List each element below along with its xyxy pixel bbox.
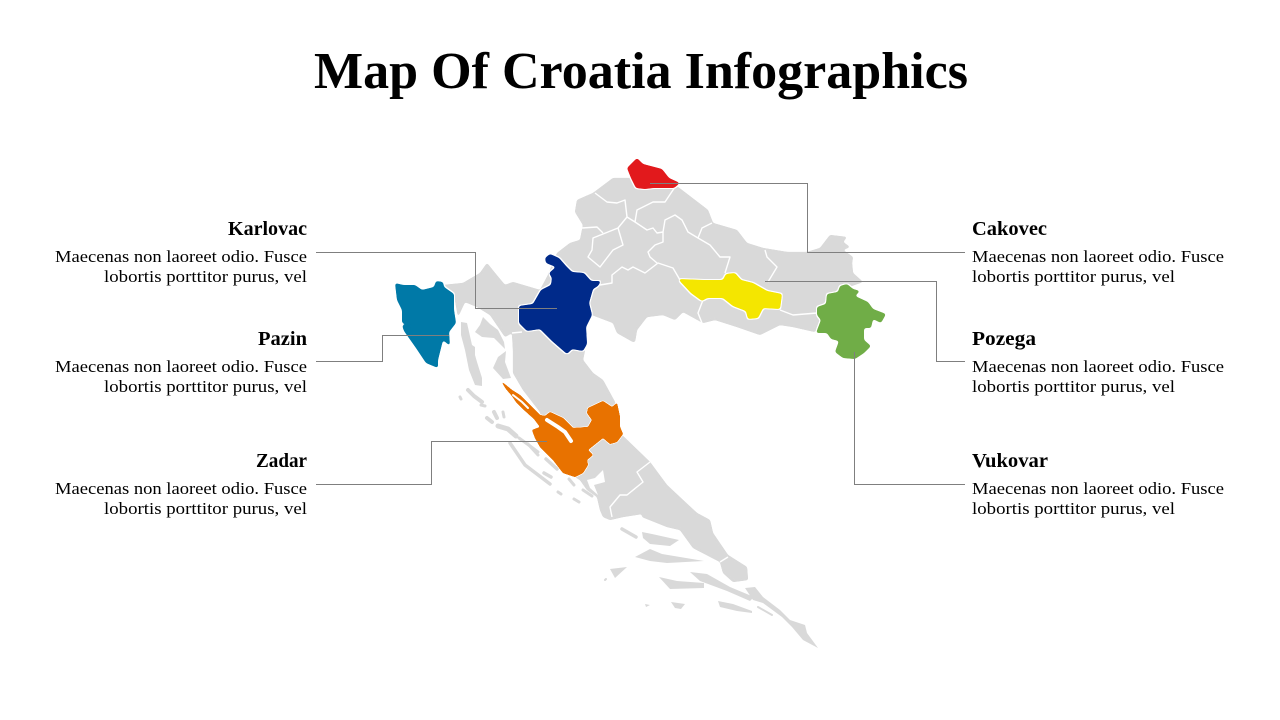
text block: Pozega: Maecenas non laoreet odio. Fusce bbox=[972, 357, 1224, 376]
title: Map Of Croatia Infographics bbox=[314, 43, 968, 100]
text block: Zadar bbox=[55, 450, 307, 518]
region: Cakovec (red) bbox=[627, 158, 680, 189]
region: Karlovac (navy) bbox=[519, 254, 601, 354]
text block: Vukovar: Vukovar bbox=[972, 450, 1048, 472]
region: Zadar (orange) bbox=[501, 381, 623, 477]
text block: Cakovec: Maecenas non laoreet odio. Fusce bbox=[972, 247, 1224, 266]
text block: Pozega: lobortis porttitor purus, vel bbox=[972, 377, 1175, 396]
text block: Pozega bbox=[972, 328, 1224, 396]
county borders bbox=[512, 187, 817, 562]
mainland base bbox=[443, 178, 863, 582]
text block: Vukovar bbox=[972, 450, 1224, 518]
text block: Zadar: Maecenas non laoreet odio. Fusce bbox=[55, 479, 307, 498]
text block: Vukovar: Maecenas non laoreet odio. Fusce bbox=[972, 479, 1224, 498]
text block: Pozega: Pozega bbox=[972, 328, 1036, 350]
text block: Cakovec: Cakovec bbox=[972, 218, 1047, 240]
text block: Pazin bbox=[55, 328, 307, 396]
text block: Karlovac: Karlovac bbox=[228, 218, 307, 240]
text block: Karlovac: lobortis porttitor purus, vel bbox=[104, 267, 307, 286]
text block: Karlovac bbox=[55, 218, 307, 286]
text block: Zadar: Zadar bbox=[256, 450, 307, 472]
text block: Karlovac: Maecenas non laoreet odio. Fusce bbox=[55, 247, 307, 266]
region: Pazin (teal) bbox=[395, 281, 456, 368]
region: Pozega (yellow) bbox=[678, 273, 782, 319]
text block: Vukovar: lobortis porttitor purus, vel bbox=[972, 499, 1175, 518]
map of Croatia bbox=[395, 158, 886, 648]
text block: Cakovec bbox=[972, 218, 1224, 286]
islands bbox=[461, 317, 818, 648]
connector lines bbox=[316, 184, 965, 484]
text block: Pazin: Maecenas non laoreet odio. Fusce bbox=[55, 357, 307, 376]
text block: Cakovec: lobortis porttitor purus, vel bbox=[972, 267, 1175, 286]
region: Vukovar (green) bbox=[816, 284, 886, 359]
text block: Zadar: lobortis porttitor purus, vel bbox=[104, 499, 307, 518]
text block: Pazin: lobortis porttitor purus, vel bbox=[104, 377, 307, 396]
text block: Pazin: Pazin bbox=[258, 328, 307, 350]
inlet near Split bbox=[587, 470, 605, 495]
